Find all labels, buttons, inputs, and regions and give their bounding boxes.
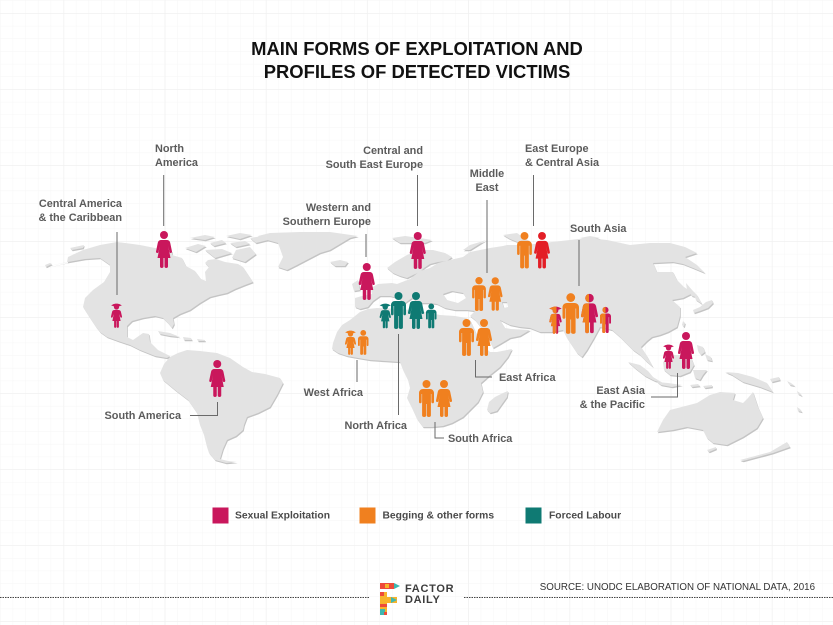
logo mark [380,583,400,615]
region: North Africa: North Africa [344,420,408,432]
region: North Africa [344,292,436,432]
region: West Africa [304,330,368,399]
region: East Europe and Central Asia [517,143,600,268]
region: Western and Southern Europe [283,202,375,300]
region: East Europe and Central Asia: East Europe [525,143,589,155]
region: Central America and the Caribbean [38,198,123,328]
region: Middle East: East [475,182,499,194]
region: East Asia and the Pacific: & the Pacific [580,399,645,411]
legend item: forced labour: Forced Labour [549,510,621,522]
source note: SOURCE: UNODC ELABORATION OF NATIONAL DATA, 2016 [540,582,815,593]
region: Western and Southern Europe: Western and [306,202,371,214]
legend item: sexual exploitation: Sexual Exploitation [235,510,330,522]
region: North America: America [155,157,199,169]
logo: Factor Daily: DAILY [405,594,440,606]
legend item: forced labour [526,508,621,524]
children and adults, split colour [549,293,611,334]
title: MAIN FORMS OF EXPLOITATION AND [251,38,583,59]
legend item: begging and other forms [360,508,494,524]
region: Middle East [470,168,504,311]
legend item: begging and other forms: Begging & other forms [382,510,494,522]
region: East Africa: East Africa [499,372,556,384]
region: East Asia and the Pacific: East Asia [596,385,646,397]
region: South Africa [419,380,513,445]
region: Central and South East Europe: Central and [363,145,423,157]
region: East Europe and Central Asia: & Central Asia [525,157,600,169]
region: South Asia: South Asia [570,223,627,235]
region: South Asia [549,223,627,334]
region: South Africa: South Africa [448,433,513,445]
logo: Factor Daily [380,583,454,615]
title: PROFILES OF DETECTED VICTIMS [264,61,570,82]
region: East Africa [459,319,556,384]
world map [45,232,803,464]
legend item: sexual exploitation [212,508,330,524]
region: South America [105,360,225,422]
region: North America [155,143,199,268]
region: South America: South America [105,410,182,422]
region: East Asia and the Pacific [580,332,694,411]
legend [212,508,621,524]
region: Central America and the Caribbean: Central America [39,198,123,210]
region: North America: North [155,143,184,155]
region: Central and South East Europe [326,145,426,269]
title [251,38,583,82]
footer dotted rule [0,596,833,598]
region: Western and Southern Europe: Southern Europe [283,216,371,228]
region: Middle East: Middle [470,168,504,180]
region: Central America and the Caribbean: & the Caribbean [38,212,122,224]
region: Central and South East Europe: South East Europe [326,159,423,171]
logo: Factor Daily: FACTOR [405,583,454,595]
region: West Africa: West Africa [304,387,364,399]
